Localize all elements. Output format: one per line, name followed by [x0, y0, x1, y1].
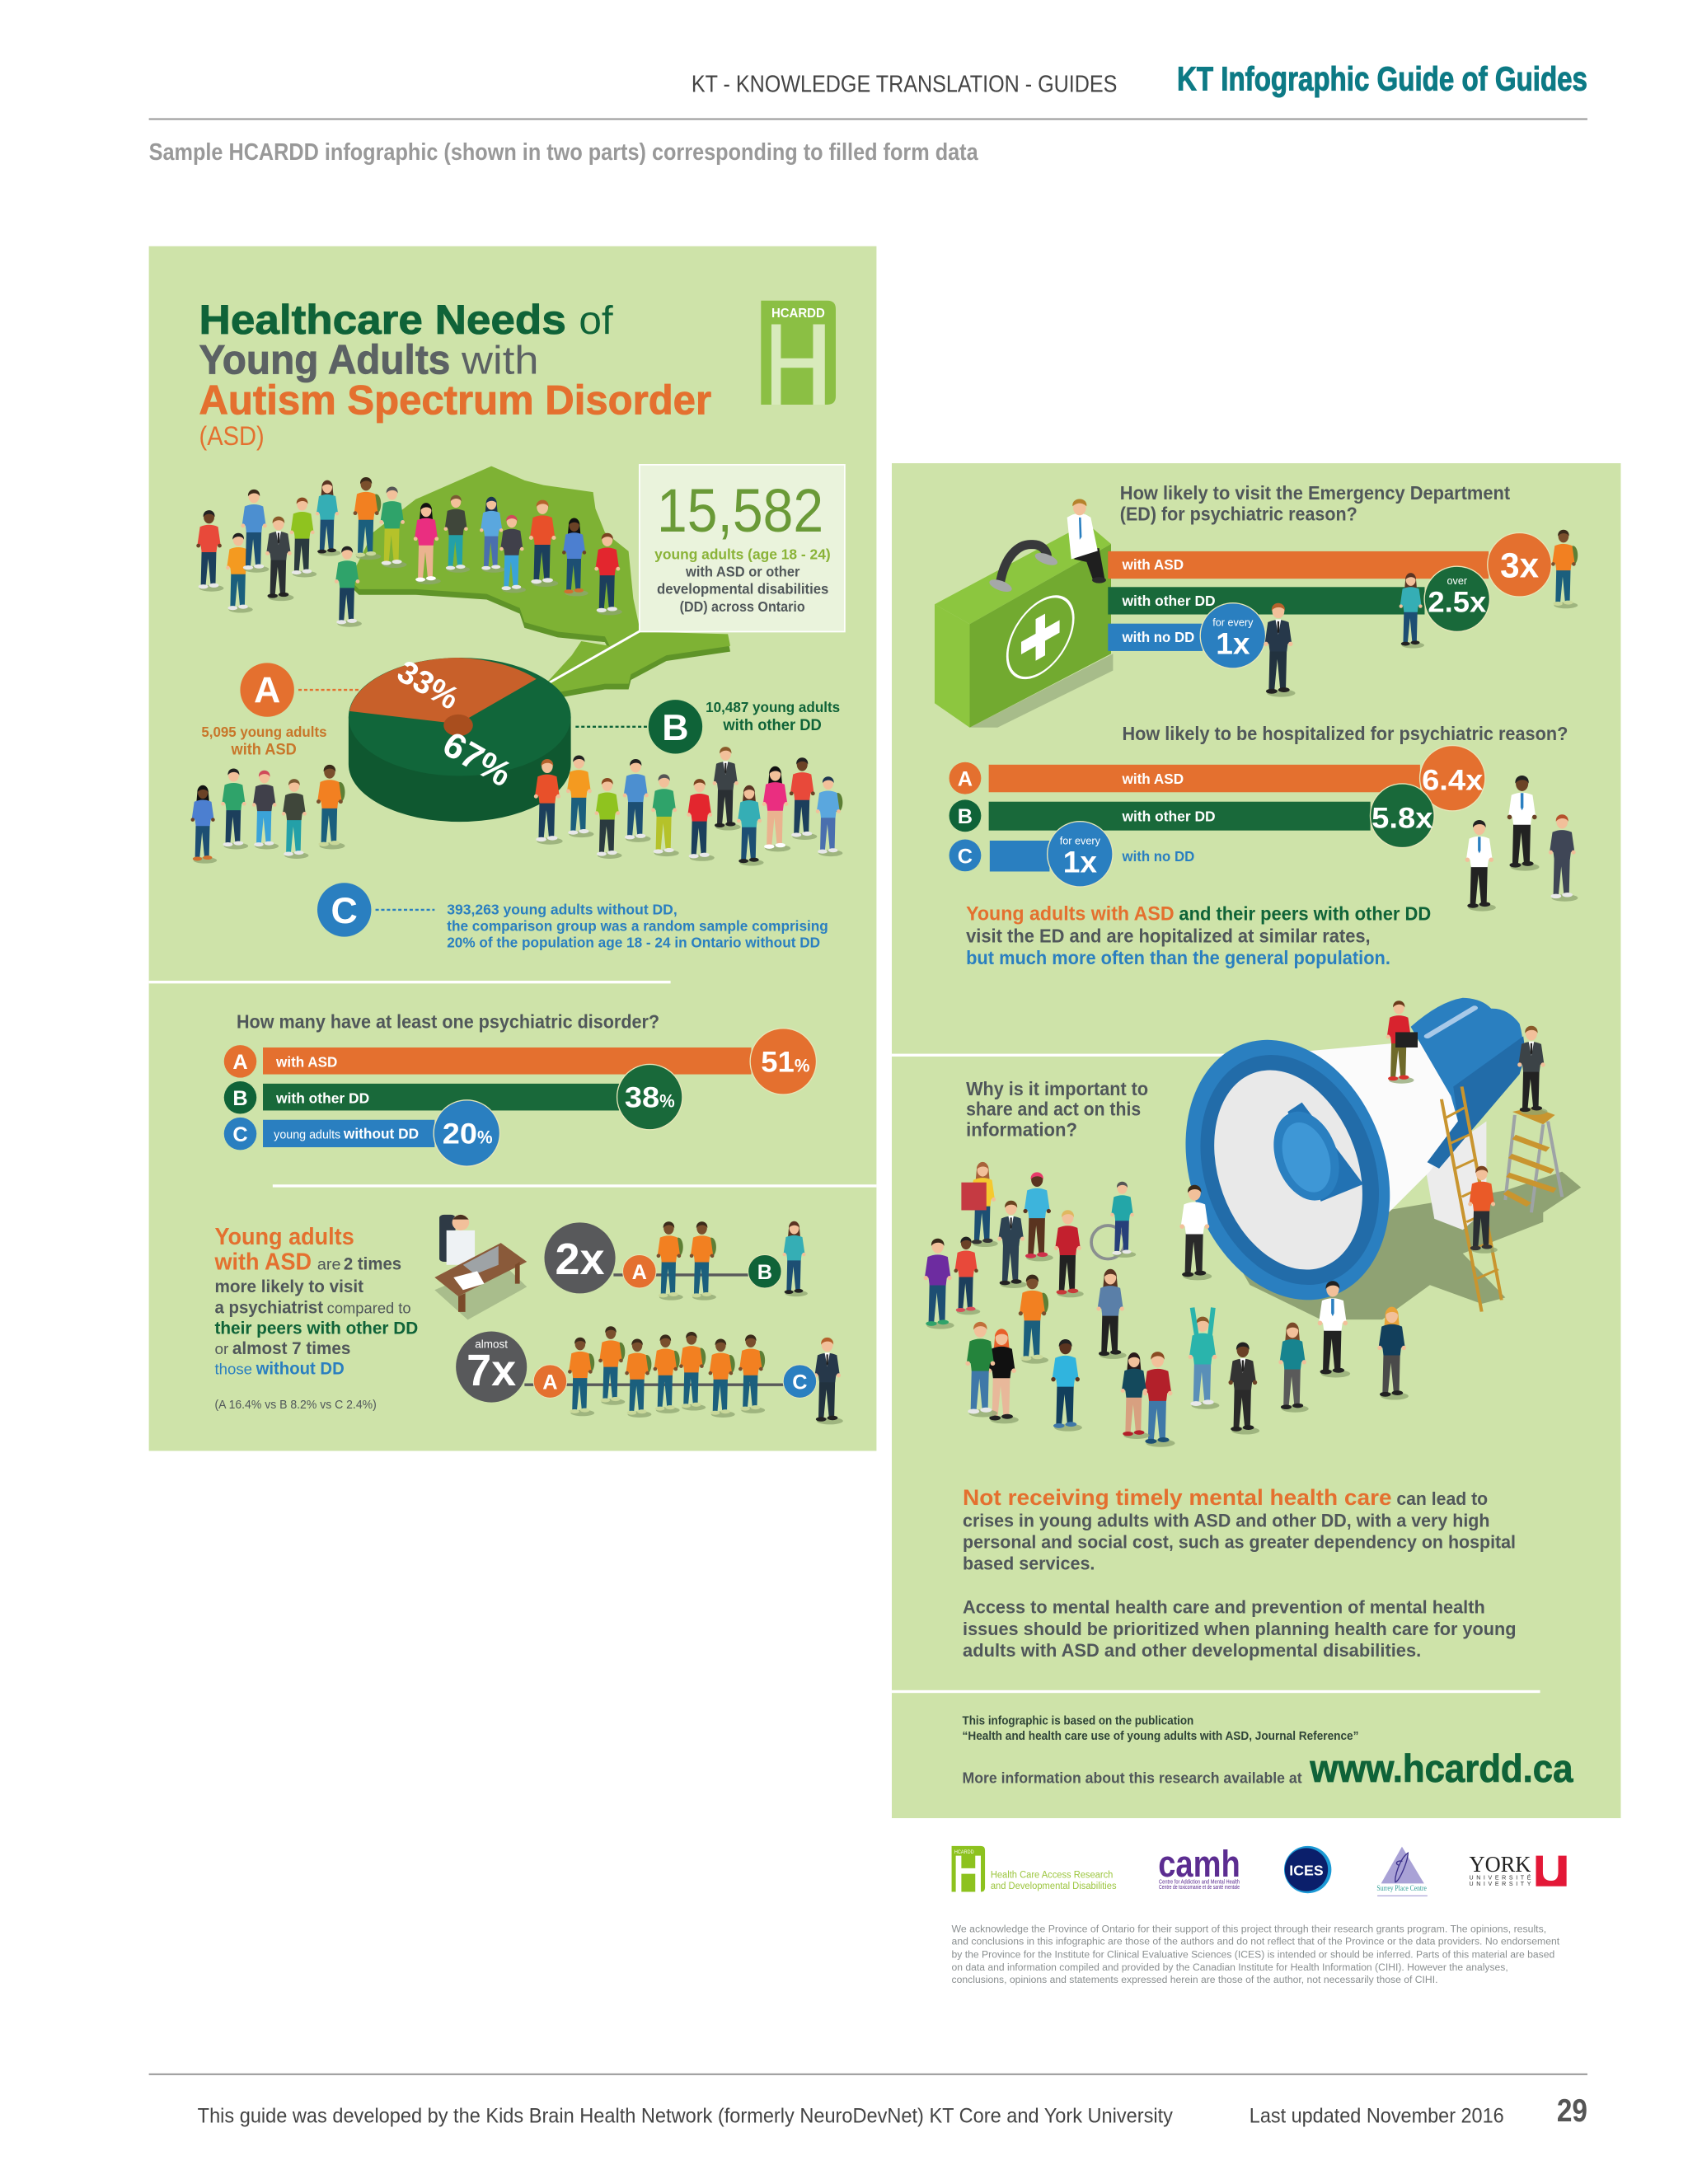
- question: [1120, 482, 1511, 524]
- logo: HCARDD full: [952, 1846, 1117, 1892]
- bar C: 20%: without DD: [343, 1126, 419, 1142]
- bar C: 20%: C: [232, 1123, 248, 1146]
- comparison row: almost 7x: [456, 1326, 843, 1424]
- logo: HCARDD full: and Developmental Disabilities: [991, 1880, 1117, 1891]
- heading: of: [579, 298, 613, 343]
- text block: compared to: [327, 1299, 411, 1316]
- paragraph: access: issues should be prioritized when planning health care for young: [963, 1619, 1517, 1639]
- group C: [317, 883, 828, 950]
- icon: first aid suitcase: [935, 499, 1113, 728]
- acknowledgement text: conclusions, opinions and statements expressed herein are those of the author, not necessarily those of CIHI.: [952, 1974, 1438, 1985]
- bar B: 5.8x: B: [958, 805, 973, 828]
- page header: [149, 60, 1587, 166]
- heading: Healthcare Needs: [199, 296, 566, 343]
- callout: 15,582: young adults (age 18 - 24): [654, 546, 831, 563]
- comparison row: 2x: A: [632, 1261, 647, 1284]
- paragraph: access: [963, 1596, 1517, 1661]
- chart question: How many have at least one psychiatric disorder?: [237, 1010, 659, 1032]
- acknowledgement text: [952, 1923, 1560, 1985]
- bar A: 51%: 51: [761, 1046, 795, 1079]
- heading: with: [461, 339, 539, 383]
- logo: York U: YORK: [1469, 1852, 1531, 1877]
- summary text: but much more often than the general population.: [966, 947, 1390, 968]
- bar C: 20%: young adults: [274, 1129, 340, 1142]
- text block: more likely to visit: [214, 1277, 363, 1296]
- group C: 393,263 young adults without DD,: [447, 902, 678, 918]
- section: reference and website: More information about this research available at: [963, 1769, 1302, 1787]
- group A: A: [254, 670, 280, 711]
- bar B: 38%: 38: [625, 1081, 659, 1114]
- paragraph: access: adults with ASD and other developmental disabilities.: [963, 1640, 1421, 1661]
- page footer: [149, 2074, 1587, 2129]
- partner logos: [952, 1843, 1567, 1896]
- callout: 15,582: 15,582: [657, 476, 823, 545]
- credit line: This guide was developed by the Kids Brain Health Network (formerly NeuroDevNet) KT Core and York University: [198, 2105, 1173, 2128]
- callout: 15,582: with ASD or other: [685, 563, 799, 579]
- section: reference and website: [963, 1714, 1573, 1791]
- bar: with ASD 3x: with ASD: [1122, 556, 1184, 573]
- running title: KT - KNOWLEDGE TRANSLATION - GUIDES: [692, 71, 1117, 97]
- heading: [199, 296, 711, 451]
- panel: left infographic part: [149, 246, 876, 1451]
- paragraph: consequences: Not receiving timely mental health care: [963, 1485, 1392, 1510]
- group A: 5,095 young adults: [201, 724, 327, 740]
- paragraph: consequences: crises in young adults with ASD and other DD, with a very high: [963, 1510, 1489, 1530]
- bar A: 6.4x: 6.4x: [1422, 764, 1484, 797]
- bar A: 6.4x: A: [958, 768, 973, 791]
- logo: ICES: [1284, 1846, 1331, 1893]
- section: why share: [924, 998, 1581, 1661]
- comparison row: almost 7x: A: [542, 1371, 558, 1394]
- logo: ICES: ICES: [1289, 1862, 1324, 1878]
- group A: [201, 663, 359, 759]
- section: psychiatric disorder bar chart: [224, 1010, 816, 1166]
- text block: 2 times: [344, 1255, 401, 1274]
- group B: with other DD: [722, 717, 822, 734]
- callout: 15,582: (DD) across Ontario: [680, 598, 805, 615]
- paragraph: consequences: personal and social cost, such as greater dependency on hospital: [963, 1532, 1516, 1553]
- acknowledgement text: by the Province for the Institute for Clinical Evaluative Sciences (ICES) is intended or should be inferred. Parts of this material are based: [952, 1949, 1554, 1961]
- bar C: 1x: [950, 822, 1194, 887]
- section: psychiatrist visit comparison: [214, 1215, 843, 1424]
- comparison row: almost 7x: C: [792, 1371, 808, 1394]
- logo: York U: UNIVERSITÉ: [1469, 1873, 1531, 1881]
- question: information?: [966, 1119, 1077, 1141]
- crowd group A: [191, 765, 345, 864]
- text block: or: [214, 1340, 228, 1357]
- bar A: 6.4x: [950, 746, 1485, 811]
- bar: with ASD 3x: [1108, 530, 1578, 608]
- bar B: 5.8x: [950, 784, 1434, 848]
- text block: without DD: [256, 1360, 345, 1379]
- section: emergency department chart: [935, 482, 1578, 968]
- question: How likely to visit the Emergency Department: [1120, 482, 1511, 504]
- question: Why is it important to: [966, 1078, 1148, 1099]
- group B: 10,487 young adults: [706, 699, 840, 715]
- bar A: 51%: [224, 1029, 816, 1094]
- bar: with no DD for every 1x: 1x: [1216, 626, 1250, 660]
- bar C: 20%: %: [477, 1127, 493, 1147]
- bar A: 51%: A: [232, 1051, 248, 1074]
- bar: with other DD over 2.5x: 2.5x: [1428, 586, 1487, 619]
- connector line: [546, 630, 640, 685]
- heading: Young Adults: [199, 336, 450, 383]
- panel background: [149, 246, 876, 1451]
- logo: camh: Centre de toxicomanie et de santé mentale: [1159, 1883, 1240, 1891]
- panel: right infographic part: [892, 463, 1620, 1818]
- question: (ED) for psychiatric reason?: [1120, 503, 1357, 524]
- logo: camh: camh: [1158, 1843, 1240, 1885]
- bar C: 20%: 20: [443, 1117, 477, 1150]
- logo: HCARDD: HCARDD: [771, 307, 825, 321]
- paragraph: consequences: based services.: [963, 1553, 1095, 1573]
- summary text: and their peers with other DD: [1179, 903, 1431, 925]
- subtitle: Sample HCARDD infographic (shown in two parts) corresponding to filled form data: [149, 139, 979, 166]
- text block: those: [214, 1361, 252, 1378]
- comparison row: 2x: B: [757, 1261, 772, 1284]
- text block: a psychiatrist: [214, 1298, 323, 1317]
- illustration: megaphone: [1151, 998, 1581, 1329]
- acknowledgement text: We acknowledge the Province of Ontario for their support of this project through their research grants program. The opinions, results,: [952, 1923, 1546, 1934]
- comparison row: 2x: 2x: [556, 1235, 605, 1284]
- bar A: 6.4x: with ASD: [1122, 771, 1184, 787]
- bar: with no DD for every 1x: [1108, 603, 1296, 697]
- bar: with other DD over 2.5x: with other DD: [1122, 593, 1216, 609]
- group B: B: [662, 707, 689, 748]
- question: How likely to be hospitalized for psychiatric reason?: [1123, 723, 1568, 744]
- bar: with no DD for every 1x: with no DD: [1122, 629, 1194, 645]
- bar: with ASD 3x: 3x: [1500, 546, 1540, 584]
- section: reference and website: “Health and health care use of young adults with ASD, Journal Reference”: [963, 1730, 1358, 1743]
- summary text: visit the ED and are hopitalized at similar rates,: [966, 925, 1371, 946]
- crowd group B: [534, 747, 842, 866]
- bar B: 38%: %: [659, 1091, 675, 1112]
- paragraph: consequences: can lead to: [1396, 1488, 1488, 1509]
- bar: with other DD over 2.5x: [1108, 566, 1489, 649]
- logo: HCARDD full: Health Care Access Research: [991, 1869, 1113, 1881]
- summary text: Young adults with ASD: [966, 904, 1175, 926]
- bar B: 38%: B: [232, 1087, 248, 1110]
- comparison row: almost 7x: almost: [475, 1338, 508, 1351]
- group C: the comparison group was a random sample comprising: [447, 918, 828, 935]
- group C: 20% of the population age 18 - 24 in Ontario without DD: [447, 934, 820, 950]
- bar C: 20%: [224, 1100, 499, 1166]
- paragraph: consequences: [963, 1485, 1516, 1573]
- group A: with ASD: [231, 742, 297, 759]
- text block: (A 16.4% vs B 8.2% vs C 2.4%): [214, 1399, 377, 1412]
- bar: with other DD over 2.5x: over: [1447, 575, 1467, 587]
- pie chart: 33% / 67%: 67%: [436, 724, 518, 794]
- question: share and act on this: [966, 1099, 1141, 1120]
- bar B: 5.8x: with other DD: [1122, 808, 1216, 825]
- icon: doctor at desk: [434, 1215, 527, 1319]
- text block: with ASD: [214, 1249, 312, 1276]
- callout: 15,582: [640, 465, 845, 631]
- crowd of people: [924, 1162, 1409, 1447]
- heading: Autism Spectrum Disorder: [199, 376, 711, 423]
- logo: camh: Centre for Addiction and Mental Health: [1159, 1877, 1240, 1885]
- acknowledgement text: on data and information compiled and provided by the Canadian Institute for Health Information (CIHI). However the analyses,: [952, 1961, 1508, 1973]
- text block: their peers with other DD: [214, 1319, 418, 1338]
- pie chart: 33% / 67%: [349, 654, 571, 822]
- group C: C: [331, 890, 358, 931]
- bar B: 5.8x: 5.8x: [1372, 801, 1433, 834]
- logo: HCARDD: [761, 301, 836, 405]
- acknowledgement text: and conclusions in this infographic are those of the authors and do not reflect that of the Province or the data providers. No endorsement: [952, 1936, 1560, 1947]
- last updated: Last updated November 2016: [1250, 2105, 1504, 2128]
- page number: 29: [1557, 2093, 1587, 2129]
- callout: 15,582: developmental disabilities: [657, 581, 828, 598]
- section: reference and website: www.hcardd.ca: [1309, 1747, 1573, 1791]
- summary text: [966, 903, 1431, 968]
- logo: HCARDD full: HCARDD: [954, 1850, 974, 1855]
- bar C: 1x: with no DD: [1122, 848, 1194, 865]
- medical staff figures: [1465, 776, 1578, 912]
- comparison row: almost 7x: 7x: [467, 1346, 516, 1395]
- logo: Surrey Place Centre: [1376, 1847, 1428, 1896]
- logo: Surrey Place Centre: Surrey Place Centre: [1376, 1885, 1427, 1893]
- panel background: [892, 463, 1620, 1818]
- paragraph: access: Access to mental health care and prevention of mental health: [963, 1596, 1485, 1617]
- question: [966, 1078, 1148, 1141]
- bar C: 1x: for every: [1060, 836, 1101, 847]
- heading: (ASD): [199, 421, 265, 451]
- section: reference and website: This infographic is based on the publication: [963, 1714, 1193, 1727]
- text block: almost 7 times: [232, 1339, 350, 1358]
- text block: [214, 1224, 418, 1412]
- text block: Young adults: [214, 1224, 354, 1250]
- bar B: 38%: with other DD: [275, 1090, 369, 1107]
- bar C: 1x: C: [958, 845, 973, 868]
- bar C: 1x: 1x: [1063, 844, 1097, 879]
- guide title: KT Infographic Guide of Guides: [1177, 60, 1587, 98]
- comparison row: 2x: [544, 1221, 808, 1301]
- map: Ontario: [349, 466, 730, 699]
- text block: are: [317, 1256, 341, 1274]
- pie chart: 33% / 67%: 33%: [392, 654, 465, 717]
- bar A: 51%: %: [795, 1056, 809, 1076]
- bar B: 38%: [224, 1064, 682, 1130]
- logo: York U: UNIVERSITY: [1469, 1881, 1531, 1887]
- bar A: 51%: with ASD: [275, 1054, 338, 1071]
- group B: [575, 699, 840, 754]
- bar: with no DD for every 1x: for every: [1212, 617, 1254, 629]
- crowd on map: [196, 477, 622, 627]
- logo: York U: [1469, 1852, 1567, 1887]
- section: title and population overview: [191, 296, 845, 950]
